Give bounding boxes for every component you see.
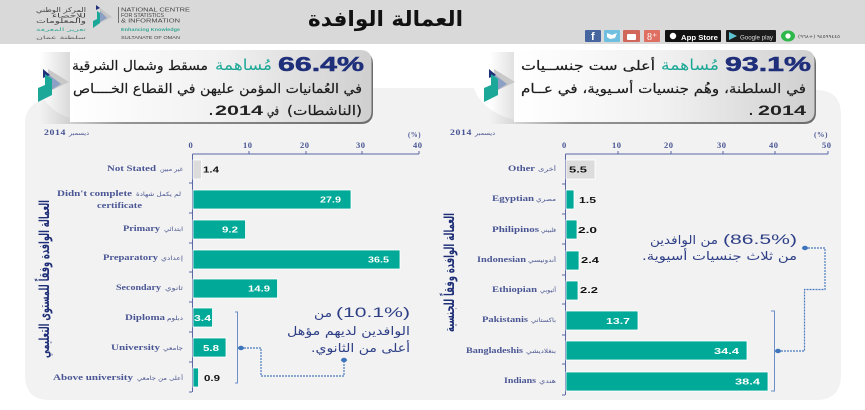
category labels: certificate — [97, 201, 143, 210]
social and app icons: Google play — [740, 34, 774, 42]
callout: 93.1% contribution — [484, 50, 816, 124]
axis numbers: 20 — [664, 140, 674, 150]
category labels: إعدادي — [161, 255, 183, 262]
category labels: Preparatory — [103, 253, 158, 262]
line three: . — [749, 102, 753, 118]
category labels: مصري — [536, 196, 556, 203]
category labels: باكستاني — [531, 317, 556, 324]
category labels: أعلى من جامعي — [137, 374, 183, 382]
social and app icons: (٩٦٨+) ٩٤٥٩٩٤٤٥ — [798, 34, 841, 40]
category labels: ثانوي — [165, 285, 183, 292]
axis numbers — [188, 140, 422, 150]
date label: 2014 — [450, 127, 472, 137]
callout text: 86.5% — [642, 231, 797, 264]
category labels: لم يكمل شهادة — [136, 191, 181, 198]
axis numbers: 10 — [243, 140, 252, 150]
category labels: Indians — [504, 376, 536, 385]
axis numbers: 30 — [717, 140, 726, 150]
value labels: 34.4 — [714, 346, 739, 356]
date label — [450, 127, 495, 137]
logo: centre name in English — [121, 8, 191, 40]
date label: ديسمبر — [68, 130, 89, 137]
contribution word: مُساهمة — [661, 56, 719, 74]
logo: centre name in English: SULTANATE OF OMAN — [121, 35, 180, 40]
line three: في — [267, 104, 279, 119]
axis — [562, 151, 828, 395]
category labels: Bangladeshis — [466, 346, 523, 355]
value labels: 3.4 — [194, 313, 211, 323]
callout: 66.4% contribution — [38, 50, 373, 124]
category labels: أخرى — [538, 165, 556, 173]
value labels: 2.2 — [580, 285, 598, 295]
category labels: أندونيسي — [528, 256, 556, 264]
category labels: Egyptian — [492, 194, 535, 203]
date label: 2014 — [44, 127, 66, 137]
value labels: 13.7 — [606, 316, 630, 326]
line two: في العُمانيات المؤمن عليهن في القطاع الخــــاص — [73, 82, 362, 97]
icon: logo mark — [484, 69, 515, 102]
category labels: أثيوبي — [540, 286, 556, 294]
axis numbers: 0 — [188, 140, 193, 150]
axis numbers: 40 — [769, 140, 778, 150]
axis numbers: 20 — [300, 140, 310, 150]
line three: 2014 — [215, 102, 263, 118]
unit label: (%) — [814, 131, 828, 139]
value labels: 1.4 — [203, 164, 219, 174]
callout text: 86.5%: (86.5%) — [723, 231, 797, 247]
category labels: ابتدائي — [164, 226, 183, 233]
social and app icons: App Store — [681, 33, 718, 42]
social and app icons: 8⁺ — [647, 32, 657, 43]
callout text: 10.1%: الوافدين لديهم مؤهل — [287, 324, 410, 339]
value labels: 2.4 — [581, 255, 599, 265]
value labels: 5.8 — [203, 343, 219, 353]
value labels: 27.9 — [320, 194, 341, 204]
logo: centre name in English: NATIONAL CENTRE — [121, 8, 191, 14]
category labels: Didn't complete — [57, 189, 133, 198]
line three: 2014 — [758, 102, 806, 118]
header band — [0, 0, 865, 44]
headline figure: 93.1% — [725, 54, 811, 76]
category labels: Primary — [123, 224, 160, 233]
chart: expatriate workers by nationality — [439, 127, 832, 395]
logo: centre name in Arabic: المركز الوطني — [36, 6, 86, 14]
vertical title: العمالة الوافدة وفقاً للجنسية — [439, 213, 458, 332]
category labels: Diploma — [125, 313, 165, 322]
bars — [566, 160, 768, 391]
unit label: (%) — [408, 131, 421, 139]
category labels: دبلوم — [167, 315, 183, 322]
line three: . — [209, 102, 213, 118]
axis numbers: 50 — [822, 140, 832, 150]
bars — [193, 160, 400, 387]
axis numbers: 30 — [356, 140, 366, 150]
bracket connector — [235, 312, 347, 383]
bracket connector — [771, 246, 825, 391]
line one: مسقط وشمال الشرقية — [72, 59, 208, 74]
axis numbers: 40 — [413, 140, 422, 150]
callout text: 10.1%: (10.1%) — [336, 304, 410, 320]
logo: centre name in English: FOR STATISTICS — [121, 13, 164, 19]
axis numbers: 10 — [612, 140, 622, 150]
logo: centre mark — [93, 5, 112, 28]
value labels: 0.9 — [204, 373, 220, 383]
callout text: 86.5%: من الوافدين — [650, 233, 718, 248]
logo: centre name in Arabic: للإحصاء — [52, 12, 86, 20]
logo: centre name in English: Enhancing Knowledge — [121, 27, 181, 32]
value labels: 1.5 — [579, 195, 596, 205]
value labels: 38.4 — [735, 376, 760, 386]
logo: centre name in Arabic: والمعلومات — [36, 17, 86, 25]
category labels: Indonesian — [477, 255, 527, 264]
category labels — [466, 164, 556, 385]
category labels — [53, 164, 183, 382]
axis numbers: 0 — [562, 140, 567, 150]
date label: ديسمبر — [474, 130, 495, 137]
category labels: فلبيني — [541, 227, 556, 234]
line one: أعلى ست جنســيات — [521, 57, 655, 74]
line three — [749, 102, 806, 118]
value labels: 14.9 — [248, 284, 270, 294]
logo: centre name in Arabic: تعزيز المعرفة — [36, 28, 87, 33]
category labels: Ethiopian — [492, 285, 538, 294]
value labels: 5.5 — [569, 164, 587, 174]
callout text: 86.5%: من ثلاث جنسيات أسيوية.‏ — [642, 248, 797, 264]
social and app icons: f — [591, 31, 595, 43]
callout text: 10.1%: من — [314, 306, 332, 321]
category labels: Pakistanis — [482, 315, 528, 324]
callout text: 10.1%: أعلى من الثانوي.‏ — [311, 340, 410, 356]
category labels: غير مبين — [160, 166, 183, 173]
social and app icons — [585, 30, 841, 43]
axis numbers — [562, 140, 832, 150]
logo: centre name in Arabic: سلطنة عمان — [36, 36, 86, 41]
category labels: Other — [508, 164, 536, 173]
value labels: 9.2 — [222, 224, 238, 234]
line two: في السلطنة، وهُم جنسيات أسـيوية، في عــام — [521, 80, 806, 97]
category labels: Philipinos — [492, 225, 539, 234]
chart: expatriate workers by education level — [34, 127, 422, 392]
logo: centre name in Arabic — [36, 6, 87, 41]
line three — [209, 102, 362, 119]
line three: (الناشطات) — [287, 104, 362, 119]
category labels: بنغلاديشي — [526, 348, 556, 355]
title: العمالة الوافدة — [308, 7, 463, 31]
callout text: 10.1% — [287, 304, 410, 356]
panel: background — [25, 88, 841, 400]
value labels: 2.0 — [578, 225, 597, 235]
value labels: 36.5 — [368, 254, 389, 264]
category labels: Above university — [53, 373, 133, 382]
vertical title: العمالة الوافدة وفقاً للمستوى التعليمي — [34, 200, 53, 358]
category labels: جامعي — [163, 345, 183, 352]
category labels: هندي — [539, 378, 556, 385]
value labels — [569, 164, 760, 386]
logo: centre name in English: & INFORMATION — [121, 18, 180, 24]
contribution word: مُساهمة — [215, 56, 272, 74]
axis — [189, 151, 419, 392]
category labels: Secondary — [116, 283, 161, 292]
icon: logo mark — [38, 69, 69, 102]
headline figure: 66.4% — [278, 54, 364, 76]
category labels: University — [111, 343, 160, 352]
date label — [44, 127, 89, 137]
category labels: Not Stated — [107, 164, 157, 173]
value labels — [194, 164, 389, 383]
